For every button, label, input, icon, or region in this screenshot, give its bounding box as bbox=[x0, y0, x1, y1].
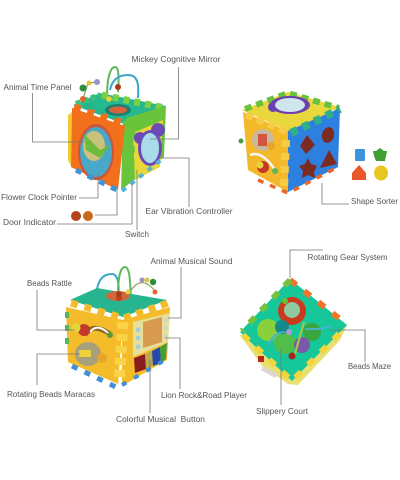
beads bbox=[116, 278, 158, 297]
right top teeth bbox=[124, 303, 168, 318]
line: slippery court bbox=[280, 348, 282, 405]
green star bbox=[373, 148, 387, 161]
line: switch bbox=[136, 170, 138, 230]
label: Switch bbox=[125, 230, 149, 239]
music panel bbox=[133, 313, 170, 357]
label: Animal Musical Sound bbox=[150, 257, 232, 266]
green right teeth bbox=[129, 132, 131, 184]
top gears bbox=[106, 291, 130, 301]
line: flower clock pointer bbox=[79, 173, 98, 198]
bottom blue feet bbox=[76, 170, 121, 192]
left orange face bbox=[71, 108, 125, 190]
beads rattle bbox=[250, 154, 278, 174]
mickey mirror bbox=[134, 123, 165, 166]
shape holes bbox=[299, 126, 337, 178]
left yellow face bbox=[66, 307, 123, 384]
cube: front view with clock and mirror bbox=[68, 67, 166, 192]
shape blocks bbox=[352, 148, 388, 180]
lower side bbox=[240, 325, 347, 385]
line: ear vibration bbox=[160, 158, 189, 207]
label: Shape Sorter bbox=[351, 197, 398, 206]
label: Rotating Beads Maracas bbox=[7, 390, 95, 399]
label: Beads Rattle bbox=[27, 279, 73, 288]
green tabs bbox=[242, 280, 290, 331]
labels bbox=[1, 55, 398, 424]
top back rim bbox=[102, 95, 165, 108]
line: lion player bbox=[165, 338, 180, 389]
top face bbox=[70, 288, 167, 317]
cube: top view with gears bbox=[240, 279, 347, 385]
blue gear bbox=[275, 320, 289, 334]
side green knob bbox=[238, 138, 244, 144]
right yellow face bbox=[122, 307, 170, 386]
orange top teeth bbox=[74, 107, 127, 124]
label: Lion Rock&Road Player bbox=[161, 391, 247, 400]
label: Slippery Court bbox=[256, 407, 309, 416]
blue square bbox=[355, 149, 365, 161]
top face bbox=[73, 93, 166, 124]
line: beads rattle bbox=[37, 290, 75, 330]
label: Door Indicator bbox=[3, 218, 56, 227]
back yellow edge bbox=[68, 112, 72, 166]
wire beads bbox=[80, 79, 121, 102]
cube: beads and musical view bbox=[66, 267, 170, 388]
label: Rotating Gear System bbox=[308, 253, 388, 262]
line: rotating beads bbox=[37, 354, 80, 385]
line: gear system bbox=[290, 250, 323, 278]
label: Mickey Cognitive Mirror bbox=[132, 55, 221, 64]
yellow crenellation bbox=[284, 140, 286, 188]
bottom feet bbox=[258, 168, 336, 193]
teal top teeth bbox=[84, 105, 126, 119]
yellow cylinder bbox=[374, 166, 388, 180]
red gear bbox=[278, 297, 306, 325]
top back rim bbox=[245, 93, 339, 109]
maracas window bbox=[252, 129, 275, 151]
left green tabs bbox=[65, 312, 69, 350]
left top teeth bbox=[71, 303, 123, 318]
left yellow face bbox=[243, 112, 290, 192]
top center dial bbox=[105, 104, 131, 116]
line: shape sorter bbox=[322, 183, 349, 204]
purple mirror bbox=[268, 96, 310, 114]
label: Ear Vibration Controller bbox=[146, 207, 233, 216]
top face bbox=[242, 92, 340, 132]
maracas window bbox=[75, 342, 107, 366]
label: Flower Clock Pointer bbox=[1, 193, 77, 202]
right blue face bbox=[288, 108, 340, 192]
line: colorful button bbox=[149, 360, 151, 413]
yellow panel bbox=[133, 120, 163, 180]
line: animal musical sound bbox=[168, 267, 181, 318]
label: Colorful Musical Button bbox=[116, 415, 205, 424]
crenellation column bbox=[119, 322, 123, 382]
blue feet bbox=[72, 366, 118, 388]
side toy detail bbox=[258, 356, 278, 378]
yellow left rim bbox=[246, 115, 288, 132]
cube: shape sorter view bbox=[238, 92, 340, 193]
line: beads maze bbox=[330, 330, 365, 362]
purple gear bbox=[294, 337, 310, 353]
top left rim bbox=[76, 95, 100, 104]
label: Beads Maze bbox=[348, 362, 392, 371]
line: on off bbox=[95, 190, 117, 215]
clock panel bbox=[78, 124, 114, 180]
beads rattle bbox=[72, 324, 113, 338]
teal diamond bbox=[240, 279, 347, 381]
yellow tabs bbox=[243, 328, 345, 381]
bead wires bbox=[107, 67, 138, 98]
label: Animal Time Panel bbox=[4, 83, 72, 92]
line: mickey mirror bbox=[150, 67, 178, 139]
line: animal time panel bbox=[32, 93, 84, 142]
green gears bbox=[257, 319, 321, 354]
leader lines bbox=[32, 67, 365, 413]
wires bbox=[96, 267, 156, 302]
orange tabs bbox=[290, 280, 345, 323]
red house bbox=[352, 165, 366, 180]
musical keys bbox=[134, 343, 167, 373]
maze wire and pointer bbox=[269, 322, 331, 360]
on/off door indicator bbox=[71, 211, 93, 221]
line: door indicator bbox=[57, 183, 132, 224]
front green rim bbox=[291, 109, 340, 133]
right green face bbox=[121, 106, 166, 190]
